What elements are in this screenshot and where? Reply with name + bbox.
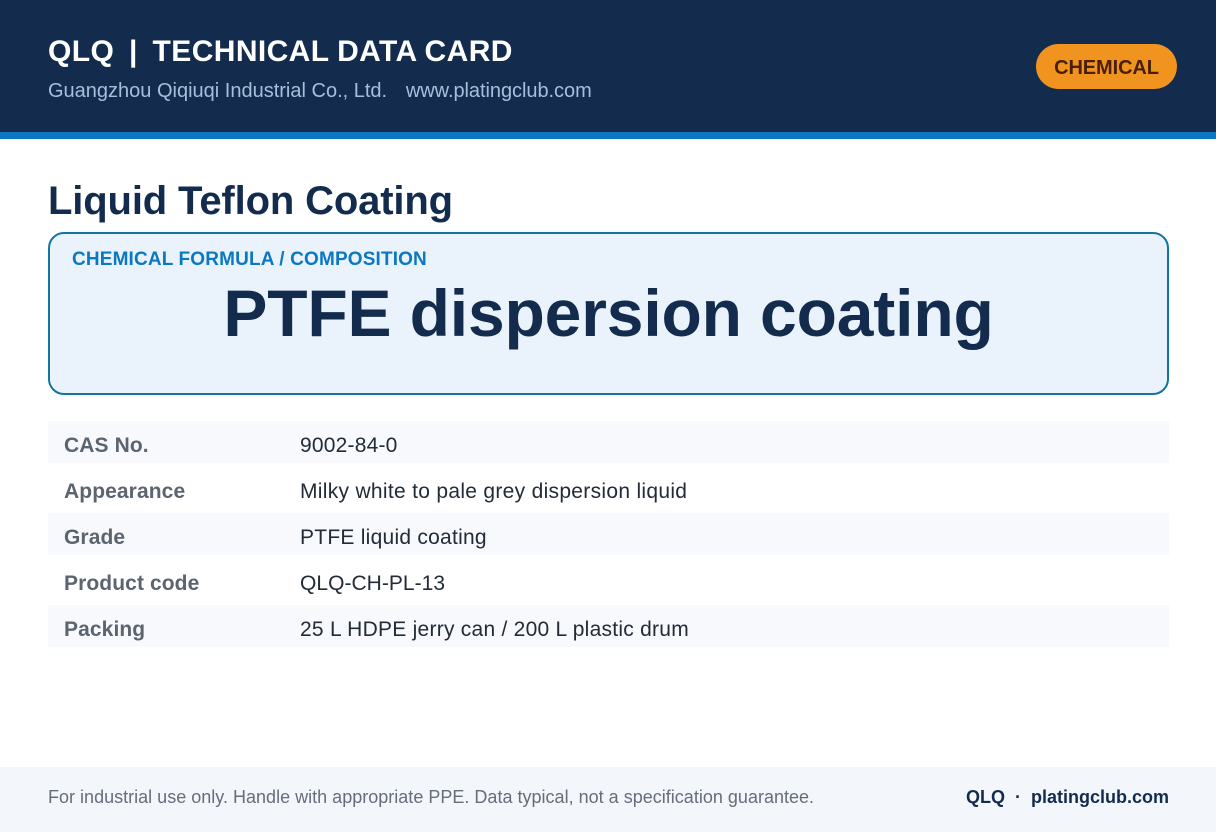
row: Appearance: Milky white to pale grey dispersion liquid <box>300 480 687 503</box>
header band <box>0 0 1216 139</box>
formula label: CHEMICAL FORMULA / COMPOSITION <box>72 249 427 270</box>
row: CAS No.: 9002-84-0 <box>300 434 398 457</box>
row: Product code: QLQ-CH-PL-13 <box>300 572 445 595</box>
category badge: CHEMICAL <box>1054 57 1159 79</box>
category badge <box>1036 44 1177 89</box>
row: Product code <box>64 572 445 595</box>
disclaimer: For industrial use only. Handle with appropriate PPE. Data typical, not a specification guarantee. <box>48 787 814 807</box>
spec table <box>64 434 689 641</box>
row: Appearance <box>64 480 687 503</box>
formula panel <box>48 232 1169 395</box>
row: CAS No. <box>48 421 1169 463</box>
footer band <box>0 767 1216 832</box>
row: Packing: Packing <box>64 618 145 641</box>
header subtitle: Guangzhou Qiqiuqi Industrial Co., Ltd. www.platingclub.com <box>48 80 592 102</box>
row: Packing <box>48 605 1169 647</box>
header title: QLQ | TECHNICAL DATA CARD <box>48 35 513 68</box>
row: Grade: PTFE liquid coating <box>300 526 487 549</box>
formula text: PTFE dispersion coating <box>223 276 994 350</box>
row: Grade: Grade <box>64 526 125 549</box>
row: Product code: Product code <box>64 572 199 595</box>
product title: Liquid Teflon Coating <box>48 179 453 223</box>
footer brand: QLQ · platingclub.com <box>966 787 1169 807</box>
row: Grade <box>48 513 1169 555</box>
row: CAS No.: CAS No. <box>64 434 149 457</box>
row: Appearance: Appearance <box>64 480 185 503</box>
row: Packing: 25 L HDPE jerry can / 200 L plastic drum <box>300 618 689 641</box>
